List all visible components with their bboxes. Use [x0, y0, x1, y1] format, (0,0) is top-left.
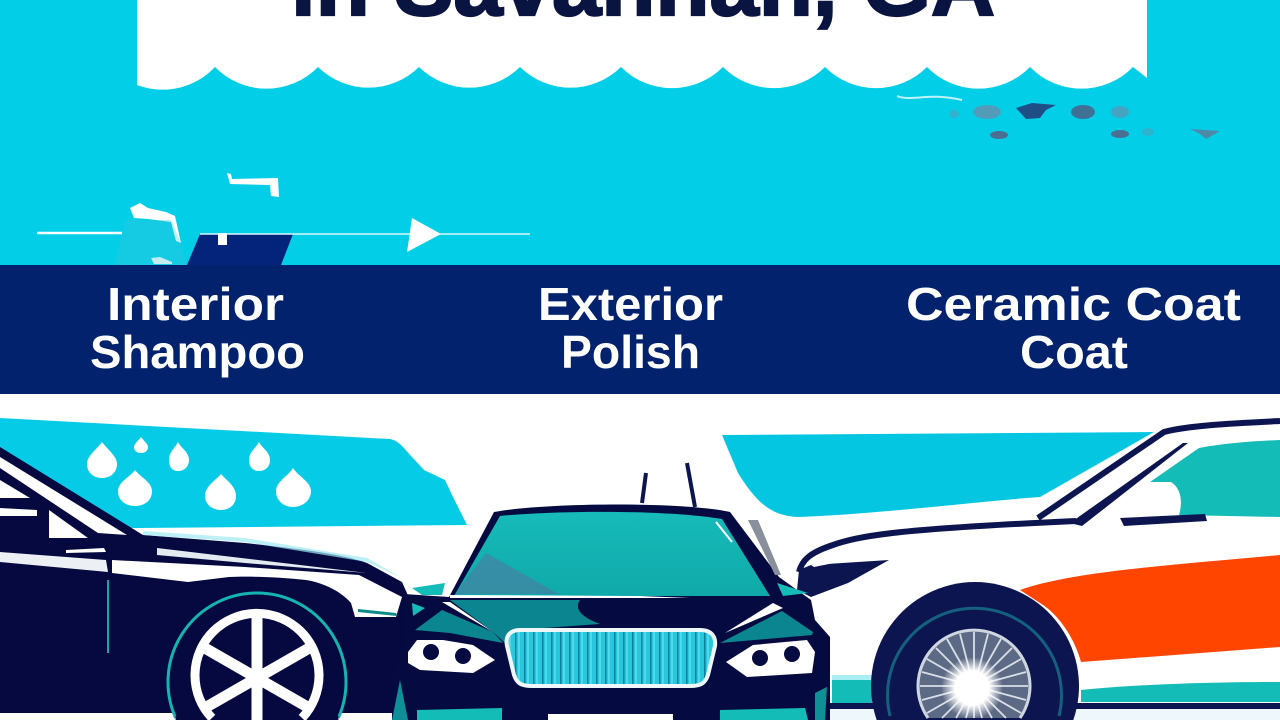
left fender [415, 610, 503, 643]
navy services band [0, 265, 1280, 394]
indicator [358, 609, 397, 616]
door handle line [1120, 514, 1207, 526]
service: ceramic coat: Ceramic Coat [906, 278, 1241, 330]
right fender [720, 611, 813, 643]
icon: water drops [87, 437, 311, 510]
underbody line [830, 703, 1280, 709]
white ground strip under wheel edge [343, 713, 392, 720]
service: exterior polish: Exterior [538, 278, 723, 330]
left wheel [168, 593, 346, 720]
wheel arch slivers [392, 680, 408, 720]
hood teal [450, 600, 600, 643]
windshield glint [716, 522, 732, 542]
service: interior shampoo [90, 278, 305, 378]
left mirror [412, 583, 445, 595]
right headlight [726, 640, 815, 677]
service: ceramic coat [906, 278, 1241, 378]
windshield [454, 512, 770, 596]
door line [107, 580, 109, 653]
cyan sky background [0, 0, 1280, 265]
ground strip [830, 709, 1280, 720]
number plate [548, 714, 673, 720]
cyan panel with water drops [0, 418, 467, 528]
left car: dark navy [0, 447, 410, 720]
right car: white with orange stripe [722, 421, 1280, 720]
side window stripes [0, 457, 127, 535]
side window [1150, 440, 1280, 517]
body [392, 504, 830, 720]
lower teal sill [1081, 682, 1280, 702]
antennas [642, 463, 695, 507]
title banner with scalloped edge [137, 0, 1147, 90]
service: ceramic coat: Coat [1020, 326, 1128, 378]
hood line [799, 521, 1076, 572]
headlight [797, 560, 889, 597]
right mirror [777, 583, 808, 596]
cowl highlight [450, 595, 690, 598]
windshield reflection [455, 553, 559, 594]
right wheel [871, 582, 1079, 720]
roof outline [1038, 421, 1280, 518]
teal sill left of wheel [832, 678, 872, 703]
service: exterior polish: Polish [561, 326, 700, 378]
hood glow [143, 531, 402, 578]
distant birds [897, 96, 1220, 139]
wiper [748, 520, 781, 575]
left headlight [408, 640, 495, 673]
grille [507, 630, 715, 686]
shoulder highlight [0, 552, 108, 572]
center car: front view [392, 463, 830, 720]
cyan panel behind right car [722, 432, 1154, 517]
service: interior shampoo: Shampoo [90, 326, 305, 378]
body [0, 447, 410, 713]
service: interior shampoo: Interior [107, 278, 284, 330]
lower air intakes [417, 708, 502, 720]
service: exterior polish [538, 278, 723, 378]
boat with arrow line [37, 173, 530, 265]
orange stripe [1020, 555, 1280, 662]
